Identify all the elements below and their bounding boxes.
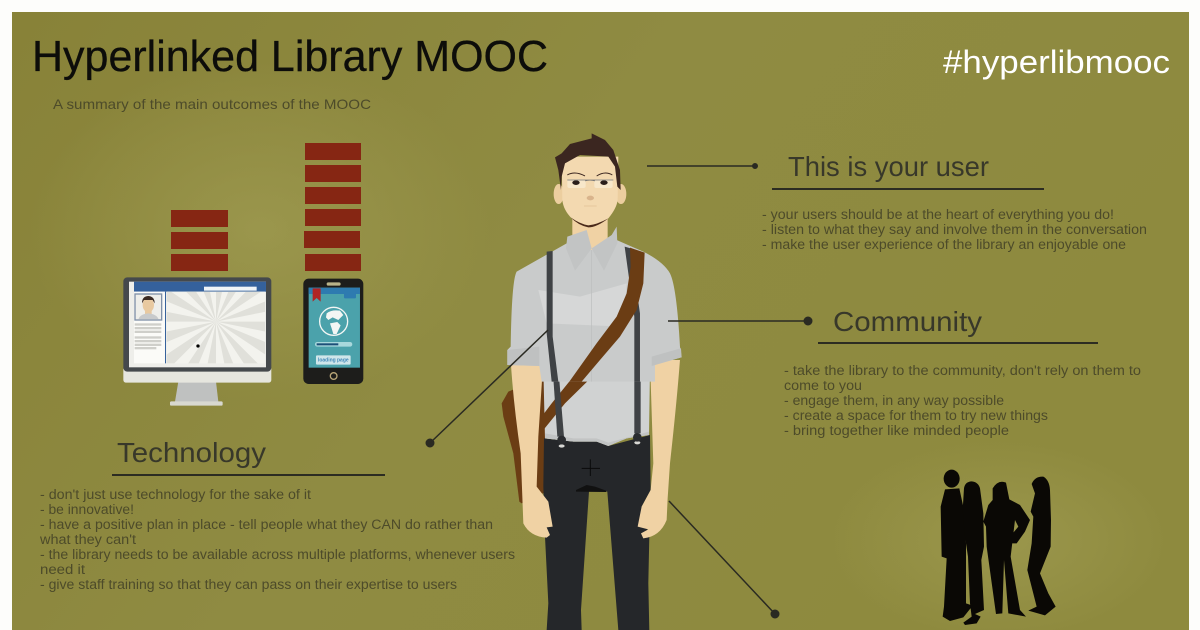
text block: user points: - listen to what they say and involve them in the conversation	[762, 222, 1147, 237]
text block: technology points: need it	[40, 562, 85, 577]
arrow: pointer to bottom section	[669, 501, 779, 618]
text block: community points: - create a space for them to try new things	[784, 408, 1048, 423]
man: lower body	[502, 360, 680, 630]
icon: smartphone: loading page	[318, 358, 349, 364]
background glow lower right	[830, 440, 1170, 630]
heading: technology: Technology	[117, 437, 266, 468]
arrow: pointer to community	[668, 317, 812, 325]
text block: technology points: - have a positive plan in place - tell people what they CAN do rather than	[40, 517, 493, 532]
icon: smartphone	[303, 279, 363, 384]
text block: technology points: what they can't	[39, 532, 136, 547]
underline: community	[818, 342, 1098, 344]
underline: this is your user	[772, 188, 1044, 190]
text block: community points	[784, 363, 1141, 438]
man: upper body	[507, 133, 682, 382]
chart: brick stack above phone	[304, 143, 361, 271]
underline: technology	[112, 474, 385, 476]
text block: technology points: - the library needs to be available across multiple platforms, whenever users	[40, 547, 515, 562]
background glow left	[30, 60, 490, 400]
text block: community points: - engage them, in any way possible	[784, 393, 1004, 408]
icon: desktop monitor	[123, 277, 272, 406]
hashtag: #hyperlibmooc	[943, 44, 1170, 80]
illustration: man with satchel	[502, 133, 682, 630]
subtitle: A summary of the main outcomes of the MOOC	[53, 96, 371, 112]
text block: user points: - make the user experience of the library an enjoyable one	[762, 237, 1126, 252]
title: Hyperlinked Library MOOC	[32, 32, 548, 81]
text block: technology points: - give staff training so that they can pass on their expertise to users	[40, 577, 457, 592]
text block: community points: - take the library to the community, don't rely on them to	[784, 363, 1141, 378]
text block: user points	[762, 207, 1147, 252]
heading: community: Community	[833, 306, 982, 337]
icon: silhouettes of four people	[941, 470, 1056, 625]
arrow: pointer to user	[647, 164, 758, 168]
text block: technology points: - don't just use technology for the sake of it	[40, 487, 311, 502]
text block: community points: - bring together like minded people	[784, 423, 1009, 438]
heading: this is your user: This is your user	[788, 151, 989, 182]
text block: user points: - your users should be at the heart of everything you do!	[762, 207, 1114, 222]
text block: technology points: - be innovative!	[40, 502, 134, 517]
text block: technology points	[39, 487, 515, 592]
text block: community points: come to you	[784, 378, 862, 393]
arrow: pointer to technology	[426, 330, 548, 447]
chart: brick stack above monitor	[171, 210, 228, 271]
